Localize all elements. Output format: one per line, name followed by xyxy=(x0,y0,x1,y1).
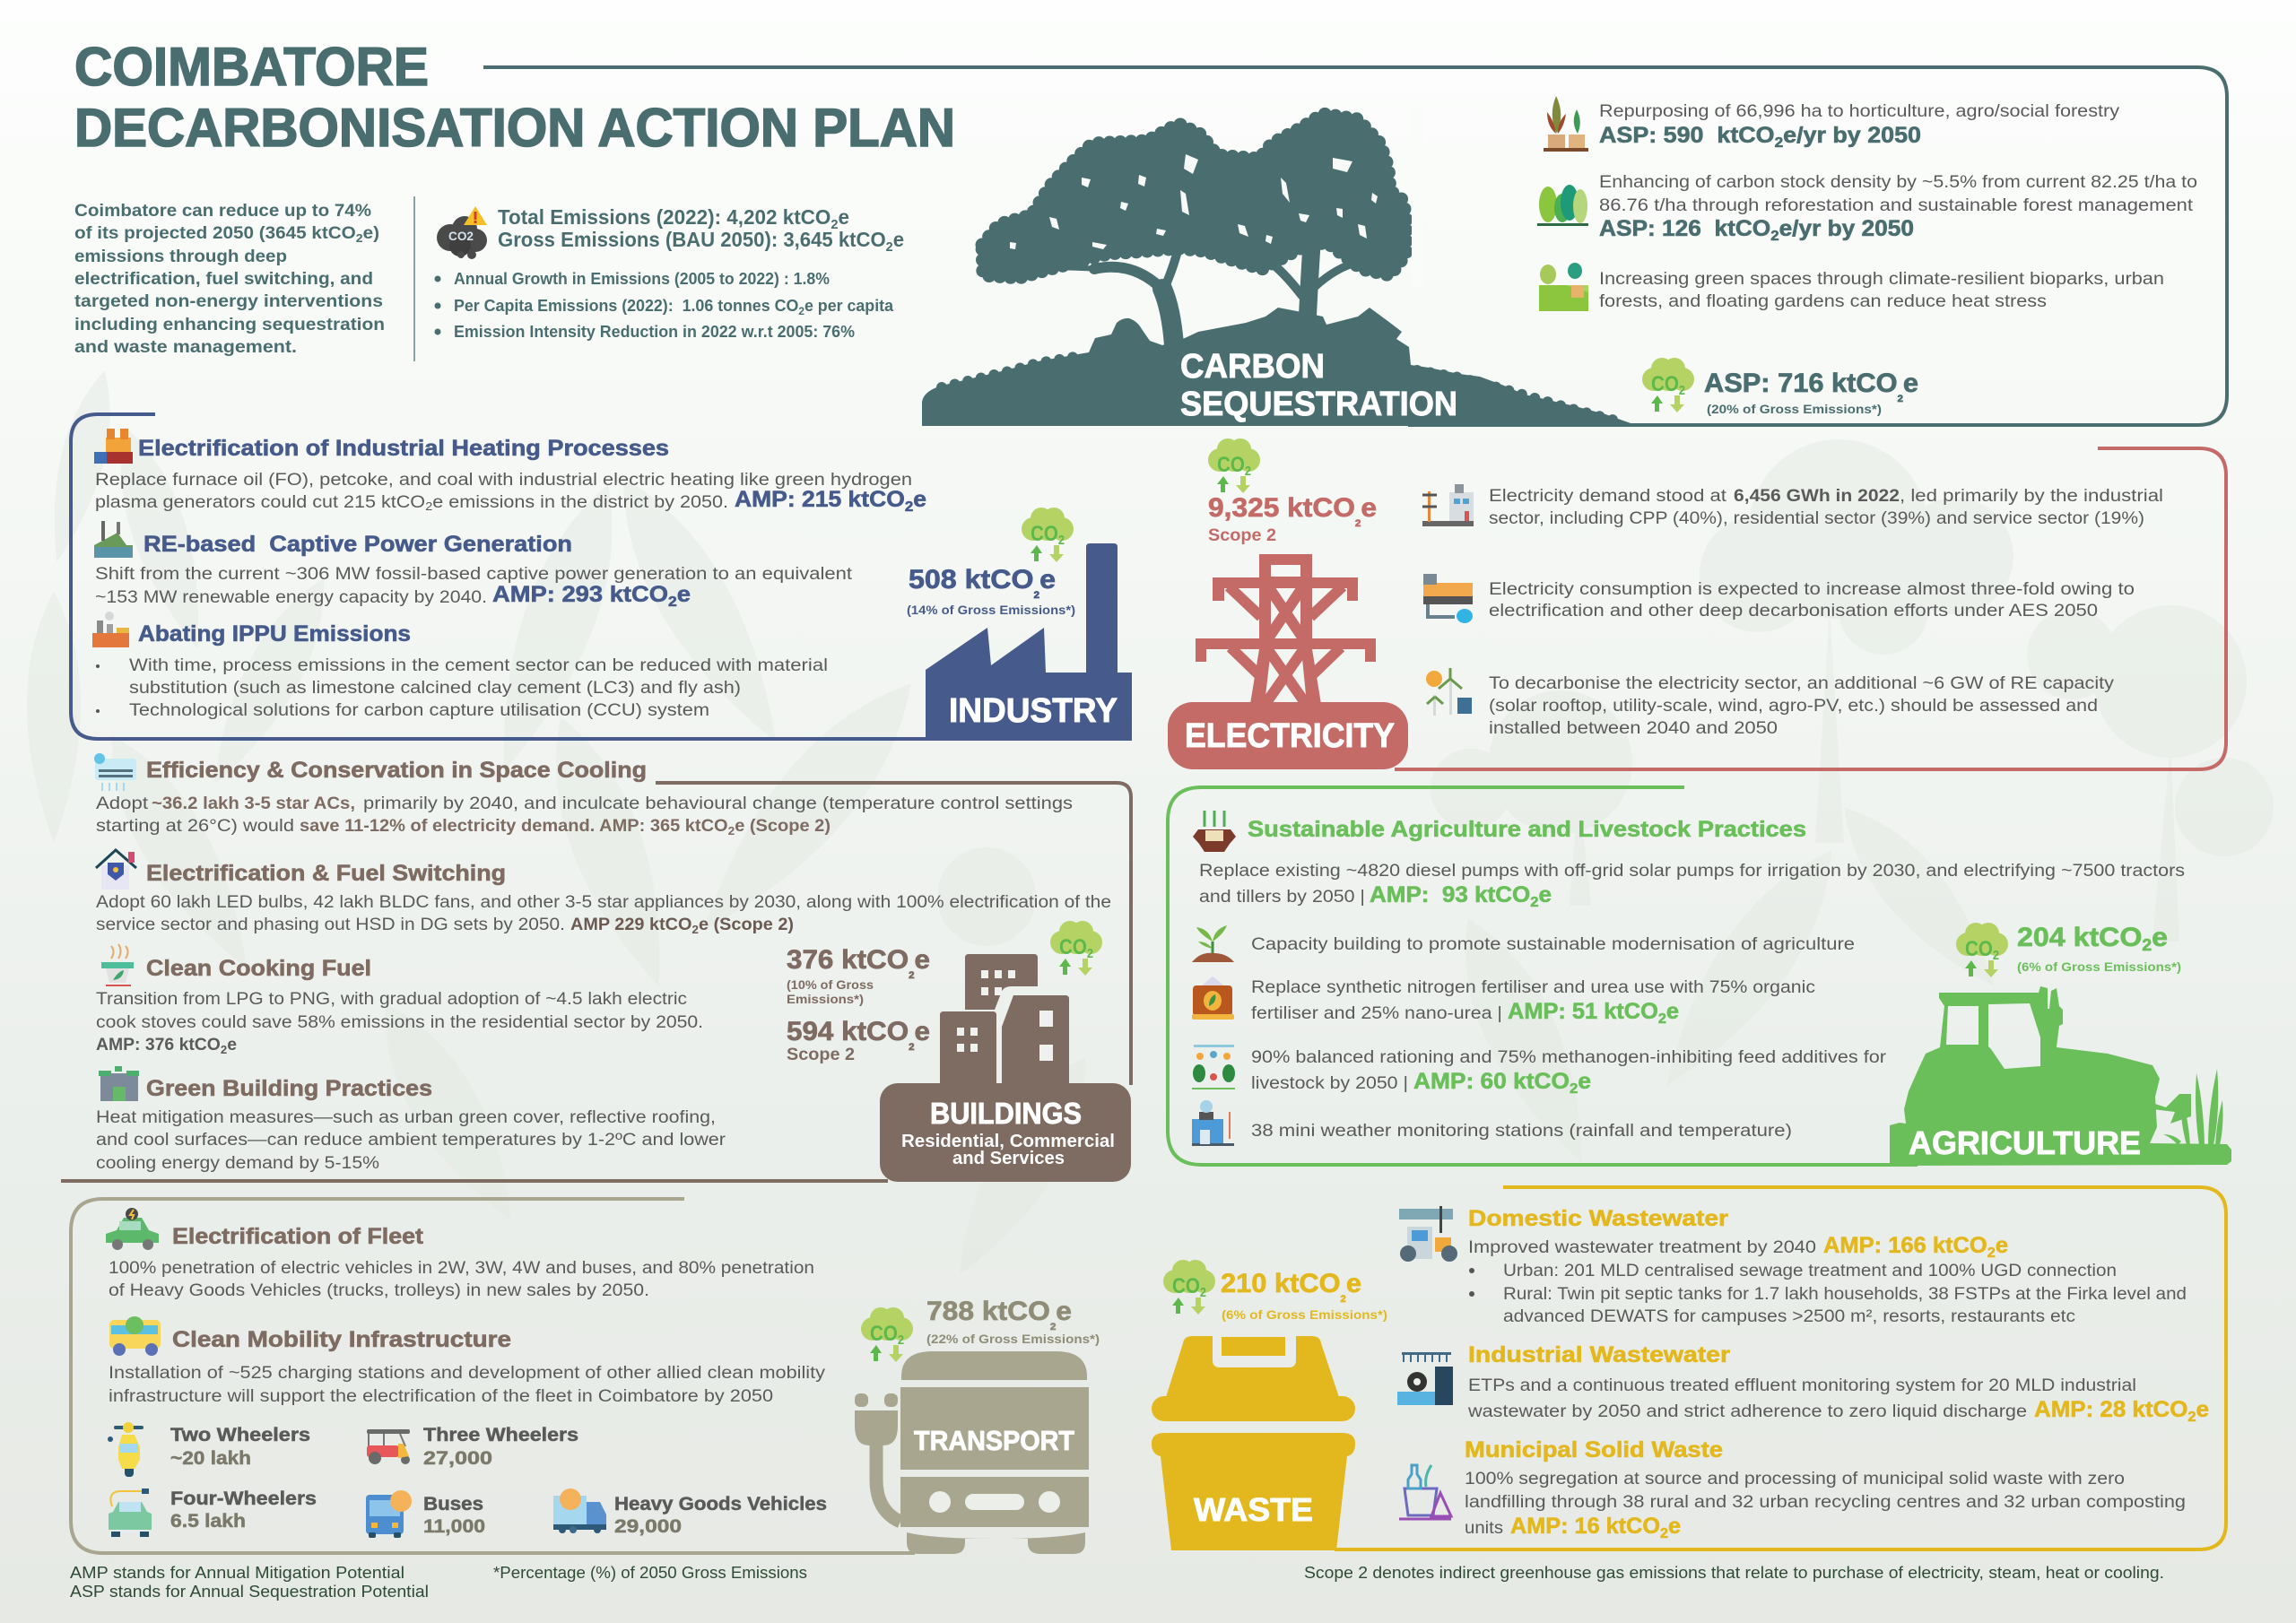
icon: factory plug xyxy=(1423,574,1473,623)
heading: efficiency and conservation: Efficiency & Conservation in Space Cooling xyxy=(146,758,647,783)
icon: weather station xyxy=(1192,1100,1234,1146)
text: green spaces: forests, and floating gardens can reduce heat stress xyxy=(1599,292,2047,311)
footnotes: *Percentage (%) of 2050 Gross Emissions xyxy=(493,1564,807,1582)
text: industrial heating xyxy=(95,471,926,515)
intro paragraph: of its projected 2050 (3645 ktCO xyxy=(74,224,333,243)
text: captive power: AMP: 293 ktCO xyxy=(492,582,653,607)
text: space cooling: Adopt xyxy=(96,794,149,813)
heading: industrial wastewater: Industrial Wastewater xyxy=(1468,1342,1730,1367)
text: electricity demand: , led primarily by the industrial xyxy=(1900,487,2163,506)
icon: CO2 cloud xyxy=(1050,921,1102,976)
text: fertiliser: fertiliser and 25% nano-urea | xyxy=(1251,1004,1502,1023)
intro paragraph: electrification, fuel switching, and xyxy=(74,270,373,289)
text: domestic wastewater: Urban: 201 MLD centralised sewage treatment and 100% UGD connection xyxy=(1503,1262,2117,1280)
text: livestock: AMP: 60 ktCO xyxy=(1413,1069,1561,1094)
stat: 594 ktCO2e: Scope 2 xyxy=(787,1046,855,1064)
text: municipal solid waste xyxy=(1465,1470,2186,1541)
text: municipal solid waste: 100% segregation at source and processing of municipal solid waste with zero xyxy=(1465,1470,2125,1488)
icon: CO2 cloud: CO xyxy=(1172,1274,1205,1298)
text: green buildings: and cool surfaces—can reduce ambient temperatures by 1-2ºC and lower xyxy=(96,1131,726,1150)
icon: green building xyxy=(99,1066,139,1101)
icon: emissions warning cloud: CO2 xyxy=(448,229,474,243)
intro paragraph: and waste management. xyxy=(74,338,297,357)
panel: agriculture xyxy=(1168,787,2231,1166)
icon: CO2 cloud xyxy=(1022,508,1074,562)
icon: CO2 cloud: 2 xyxy=(1993,948,1999,963)
stat: 376 ktCO2e: (10% of Gross xyxy=(787,977,874,992)
item: two wheelers xyxy=(108,1422,310,1477)
text: livestock: 90% balanced rationing and 75% methanogen-inhibiting feed additives for xyxy=(1251,1048,1887,1067)
stat: 508 ktCO2e: e xyxy=(1039,565,1056,595)
text: green buildings: cooling energy demand by 5-15% xyxy=(96,1154,379,1173)
heading: sustainable agriculture: Sustainable Agriculture and Livestock Practices xyxy=(1248,817,1806,842)
label: buildings: and Services xyxy=(952,1149,1065,1168)
stat: 594 ktCO2e: e xyxy=(915,1017,930,1046)
text: space cooling: starting at 26°C) would xyxy=(96,817,294,836)
stat: 204 ktCO2e: e xyxy=(2152,923,2168,952)
icon: city power xyxy=(1422,484,1474,526)
text: livestock: 2 xyxy=(1570,1081,1578,1097)
text: captive power xyxy=(95,565,853,610)
text: industrial heating: 2 xyxy=(425,499,432,513)
illustration: waste bin xyxy=(1152,1336,1355,1550)
emissions statistics: 2 xyxy=(798,305,804,317)
text: fleet xyxy=(109,1259,814,1300)
text: municipal solid waste: e xyxy=(1668,1514,1681,1539)
text: industrial heating: Replace furnace oil (FO), petcoke, and coal with industrial electric heating like green hydrogen xyxy=(95,471,912,490)
text: domestic wastewater xyxy=(1468,1233,2187,1326)
icon: green park xyxy=(1539,263,1588,311)
emissions statistics: 2 xyxy=(886,239,893,255)
text: horticulture and ASP 590: ASP: 590 ktCO xyxy=(1599,123,1762,148)
text: green spaces: Increasing green spaces through climate-resilient bioparks, urban xyxy=(1599,270,2164,289)
item: two wheelers: ~20 lakh xyxy=(170,1448,251,1469)
footnotes: AMP stands for Annual Mitigation Potential xyxy=(70,1564,404,1582)
stat: 204 ktCO2e xyxy=(2017,923,2181,974)
text: domestic wastewater: AMP: 166 ktCO xyxy=(1823,1233,1984,1258)
text: electricity demand: sector, including CPP (40%), residential sector (39%) and service sector (19%) xyxy=(1489,509,2144,528)
illustration: buildings xyxy=(880,954,1131,1182)
text: fuel switching: service sector and phasing out HSD in DG sets by 2050. xyxy=(96,916,565,934)
illustration: trees on a hill xyxy=(922,108,1633,426)
item: three wheelers xyxy=(367,1425,578,1469)
text: fuel switching xyxy=(96,893,1111,936)
icon: sustainable agriculture xyxy=(1193,811,1236,852)
emissions statistics: 2 xyxy=(831,217,839,232)
text: industrial heating: 2 xyxy=(905,499,913,515)
icon: CO2 cloud: CO xyxy=(1651,372,1683,396)
text: electricity consumption: Electricity consumption is expected to increase almost three-fold owing to xyxy=(1489,580,2135,599)
item: buses: 11,000 xyxy=(423,1516,485,1537)
text: electricity demand: 6,456 GWh in 2022 xyxy=(1734,487,1900,506)
intro paragraph: emissions through deep xyxy=(74,247,287,266)
item: four wheelers: Four-Wheelers xyxy=(170,1488,317,1509)
stat: 508 ktCO2e xyxy=(907,565,1075,617)
text: space cooling: 2 xyxy=(728,824,735,838)
text: carbon stock density and ASP 126: e/yr by 2050 xyxy=(1779,216,1914,241)
stat: 788 ktCO2e: 788 ktCO xyxy=(926,1297,1043,1326)
icon: CO2 cloud: CO xyxy=(1217,453,1249,477)
panel: industry xyxy=(71,414,1132,741)
label: buildings: Residential, Commercial xyxy=(901,1132,1115,1151)
text: fertiliser: AMP: 51 ktCO xyxy=(1508,999,1656,1024)
stat: 9,325 ktCO2e: 9,325 ktCO xyxy=(1208,493,1347,523)
emissions statistics: Emission Intensity Reduction in 2022 w.r.t 2005: 76% xyxy=(454,323,855,341)
stat: 594 ktCO2e xyxy=(787,1017,930,1064)
text: electricity demand xyxy=(1489,487,2163,528)
text: clean cooking: e xyxy=(227,1036,237,1055)
label: carbon sequestration xyxy=(1180,348,1457,423)
label: buildings: BUILDINGS xyxy=(930,1097,1082,1130)
text: industrial wastewater xyxy=(1467,1376,2209,1425)
text: clean cooking: Transition from LPG to PNG, with gradual adoption of ~4.5 lakh electric xyxy=(96,990,687,1009)
stat: 376 ktCO2e: e xyxy=(915,945,930,975)
stat: 204 ktCO2e: 204 ktCO xyxy=(2017,923,2134,952)
text: captive power: ~153 MW renewable energy capacity by 2040. xyxy=(95,588,487,607)
text: decarbonise electricity: installed between 2040 and 2050 xyxy=(1489,719,1778,738)
icon: recycling waste xyxy=(1399,1465,1451,1519)
text: carbon stock density and ASP 126: 2 xyxy=(1770,229,1779,244)
text: industrial wastewater: 2 xyxy=(2187,1410,2196,1425)
text: electricity demand: Electricity demand stood at xyxy=(1489,487,1732,506)
icon: livestock feed xyxy=(1192,1045,1235,1089)
item: heavy goods vehicles: Heavy Goods Vehicles xyxy=(614,1494,827,1515)
panel: waste xyxy=(1152,1187,2226,1550)
panel: carbon sequestration xyxy=(483,67,2227,426)
icon: CO2 cloud: CO xyxy=(1059,935,1091,959)
panel: electricity xyxy=(1168,438,2226,769)
label: carbon sequestration: SEQUESTRATION xyxy=(1180,386,1457,423)
text: fuel switching: 2 xyxy=(691,923,699,936)
intro paragraph: Coimbatore can reduce up to 74% xyxy=(74,202,371,221)
text: municipal solid waste: AMP: 16 ktCO xyxy=(1510,1514,1658,1539)
label: transport: TRANSPORT xyxy=(914,1425,1074,1456)
text: industrial heating: plasma generators could cut 215 ktCO xyxy=(95,493,386,512)
emissions statistics: e xyxy=(893,228,904,251)
text: industrial heating: AMP: 215 ktCO xyxy=(735,487,895,512)
text: livestock: livestock by 2050 | xyxy=(1251,1074,1408,1093)
text: municipal solid waste: 2 xyxy=(1660,1526,1668,1541)
emissions statistics: Annual Growth in Emissions (2005 to 2022) : 1.8% xyxy=(454,270,830,288)
text: charging stations: infrastructure will support the electrification of the fleet in Coimbatore by 2050 xyxy=(109,1387,773,1406)
stat: 210 ktCO2e: e xyxy=(1346,1269,1361,1298)
text: IPPU bullets xyxy=(96,656,828,720)
illustration: transmission pylon xyxy=(1196,554,1376,704)
text: domestic wastewater: 2 xyxy=(1987,1245,1996,1261)
icon: clean cooking xyxy=(101,944,134,985)
text: fertiliser: 2 xyxy=(1658,1011,1666,1027)
heading: clean mobility infrastructure: Clean Mobility Infrastructure xyxy=(172,1327,511,1352)
text: fleet: 100% penetration of electric vehicles in 2W, 3W, 4W and buses, and 80% penetration xyxy=(109,1259,814,1278)
text: space cooling: save 11-12% of electricity demand. AMP: 365 ktCO xyxy=(300,817,706,836)
stat: 204 ktCO2e: 2 xyxy=(2142,936,2152,954)
text: carbon stock density and ASP 126: Enhancing of carbon stock density by ~5.5% from current 82.25 t/ha to xyxy=(1599,173,2197,192)
item: two wheelers: Two Wheelers xyxy=(170,1425,310,1445)
icon: domestic wastewater plant xyxy=(1399,1206,1457,1262)
icon: captive power xyxy=(94,521,133,558)
text: domestic wastewater: advanced DEWATS for campuses >2500 m², resorts, restaurants etc xyxy=(1503,1307,2075,1326)
heading: municipal solid waste: Municipal Solid Waste xyxy=(1465,1437,1723,1462)
label: carbon sequestration: CARBON xyxy=(1180,348,1325,386)
icon: CO2 cloud xyxy=(1642,358,1694,412)
text: IPPU bullets: Technological solutions for carbon capture utilisation (CCU) system xyxy=(129,701,709,720)
footnotes: Scope 2 denotes indirect greenhouse gas emissions that relate to purchase of electricity, steam, heat or cooling. xyxy=(1304,1564,2164,1582)
heading: clean cooking fuel: Clean Cooking Fuel xyxy=(146,956,371,981)
emissions statistics: e per capita xyxy=(804,297,894,315)
text: livestock xyxy=(1251,1048,1887,1097)
text: domestic wastewater: Improved wastewater treatment by 2040 xyxy=(1468,1238,1816,1257)
text: green buildings: Heat mitigation measures—such as urban green cover, reflective roofing, xyxy=(96,1108,716,1127)
text: diesel pumps: e xyxy=(1539,882,1552,907)
label: electricity xyxy=(1168,702,1408,769)
text: electricity consumption: electrification and other deep decarbonisation efforts under AES 2050 xyxy=(1489,602,2098,621)
stat: ASP 716 xyxy=(1704,369,1918,416)
item: four wheelers xyxy=(109,1488,317,1537)
icon: CO2 cloud xyxy=(861,1307,913,1362)
text: horticulture and ASP 590: e/yr by 2050 xyxy=(1783,123,1921,148)
item: three wheelers: 27,000 xyxy=(423,1448,492,1469)
item: heavy goods vehicles: 29,000 xyxy=(614,1516,682,1537)
icon: renewables xyxy=(1426,668,1472,716)
stat: ASP 716: e xyxy=(1903,369,1918,398)
stat: 9,325 ktCO2e xyxy=(1208,493,1377,545)
heading: RE-based captive power: RE-based Captive Power Generation xyxy=(144,532,572,557)
intro paragraph xyxy=(74,202,385,357)
illustration: tractor xyxy=(1890,986,2231,1166)
stat: 210 ktCO2e: 210 ktCO xyxy=(1221,1269,1337,1298)
text: industrial wastewater: ETPs and a continuous treated effluent monitoring system for 20 MLD industrial xyxy=(1468,1376,2136,1395)
stat: ASP 716: (20% of Gross Emissions*) xyxy=(1707,402,1882,416)
title xyxy=(74,37,955,158)
emissions statistics xyxy=(435,205,904,341)
stat: 508 ktCO2e: 2 xyxy=(1034,590,1039,601)
stat: 788 ktCO2e: 2 xyxy=(1050,1322,1056,1332)
text: space cooling: primarily by 2040, and inculcate behavioural change (temperature control settings xyxy=(363,794,1073,813)
heading: electrification of fleet: Electrification of Fleet xyxy=(172,1224,424,1249)
text: carbon stock density and ASP 126: 86.76 t/ha through reforestation and sustainable forest management xyxy=(1599,196,2194,215)
text: space cooling xyxy=(96,794,1073,838)
stat: 376 ktCO2e xyxy=(787,945,930,1006)
illustration: electric bus with plug xyxy=(855,1351,1089,1554)
icon: CO2 cloud: 2 xyxy=(1245,464,1251,479)
text: decarbonise electricity xyxy=(1489,674,2115,738)
text: horticulture and ASP 590 xyxy=(1599,102,2120,151)
icon: industrial heating xyxy=(94,429,133,464)
text: diesel pumps: Replace existing ~4820 diesel pumps with off-grid solar pumps for irrigation by 2030, and electrifying ~7500 tractors xyxy=(1199,862,2185,881)
text: charging stations xyxy=(109,1364,826,1406)
stat: 788 ktCO2e xyxy=(926,1297,1100,1346)
icon: cement plant xyxy=(92,612,129,647)
stat: 376 ktCO2e: Emissions*) xyxy=(787,992,864,1006)
stat: ASP 716: ASP: 716 ktCO xyxy=(1704,369,1892,398)
text: municipal solid waste: units xyxy=(1465,1519,1503,1538)
text: weather stations: 38 mini weather monitoring stations (rainfall and temperature) xyxy=(1251,1122,1792,1141)
panel: transport xyxy=(71,1199,1100,1554)
intro paragraph: including enhancing sequestration xyxy=(74,316,385,334)
text: horticulture and ASP 590: 2 xyxy=(1775,135,1783,151)
text: industrial heating: e emissions in the district by 2050. xyxy=(432,493,728,512)
icon: CO2 cloud: CO xyxy=(1965,937,1997,961)
emissions statistics: Per Capita Emissions (2022): 1.06 tonnes CO xyxy=(454,297,802,315)
text: fertiliser: e xyxy=(1666,999,1679,1024)
text: fuel switching: AMP 229 ktCO xyxy=(570,916,687,934)
icon: electric car xyxy=(106,1208,159,1250)
item: buses: Buses xyxy=(423,1494,483,1515)
text: IPPU bullets: substitution (such as limestone calcined clay cement (LC3) and fly ash) xyxy=(129,679,741,698)
icon: CO2 cloud: 2 xyxy=(1679,383,1685,398)
text: diesel pumps: AMP: 93 ktCO xyxy=(1370,882,1524,907)
icon: potted plants xyxy=(1544,96,1588,152)
text: diesel pumps: and tillers by 2050 | xyxy=(1199,888,1365,907)
stat: 204 ktCO2e: (6% of Gross Emissions*) xyxy=(2017,959,2181,974)
stat: 508 ktCO2e: 508 ktCO xyxy=(909,565,1025,595)
text: carbon stock density and ASP 126: ASP: 126 ktCO xyxy=(1599,216,1762,241)
text: clean cooking: AMP: 376 ktCO xyxy=(96,1036,218,1055)
heading: domestic wastewater: Domestic Wastewater xyxy=(1468,1206,1728,1231)
text: fertiliser: Replace synthetic nitrogen fertiliser and urea use with 75% organic xyxy=(1251,978,1815,997)
icon: emissions warning cloud xyxy=(437,206,487,259)
icon: fertiliser bag xyxy=(1192,976,1234,1020)
heading: electrification and fuel switching: Electrification & Fuel Switching xyxy=(146,861,506,886)
panel: buildings xyxy=(61,753,1131,1182)
text: charging stations: Installation of ~525 charging stations and development of other allied clean mobility xyxy=(109,1364,826,1383)
icon: CO2 cloud: 2 xyxy=(1200,1285,1206,1300)
stat: ASP 716: 2 xyxy=(1898,394,1903,404)
text: fuel switching: e (Scope 2) xyxy=(699,916,794,934)
text: industrial wastewater: wastewater by 2050 and strict adherence to zero liquid discharge xyxy=(1467,1402,2027,1421)
text: clean cooking xyxy=(96,990,703,1056)
stat: 376 ktCO2e: 2 xyxy=(909,970,915,981)
text: fertiliser xyxy=(1251,978,1815,1027)
icon: air conditioner xyxy=(94,753,136,791)
text: electricity consumption xyxy=(1489,580,2135,621)
text: captive power: 2 xyxy=(668,595,677,610)
text: decarbonise electricity: To decarbonise the electricity sector, an additional ~6 GW of RE capacity xyxy=(1489,674,2115,693)
title: COIMBATORE xyxy=(74,37,429,97)
text: clean cooking: cook stoves could save 58% emissions in the residential sector by 2050. xyxy=(96,1013,703,1032)
stat: 376 ktCO2e: 376 ktCO xyxy=(787,945,903,975)
stat: 210 ktCO2e: (6% of Gross Emissions*) xyxy=(1222,1307,1387,1322)
intro paragraph: 2 xyxy=(356,231,363,245)
footnotes: ASP stands for Annual Sequestration Potential xyxy=(70,1583,429,1601)
text: captive power: Shift from the current ~306 MW fossil-based captive power generation to an equivalent xyxy=(95,565,853,584)
heading: abating IPPU emissions: Abating IPPU Emissions xyxy=(138,621,411,647)
item: four wheelers: 6.5 lakh xyxy=(170,1511,246,1532)
text: decarbonise electricity: (solar rooftop, utility-scale, wind, agro-PV, etc.) should be assessed and xyxy=(1489,697,2098,716)
stat: 788 ktCO2e: (22% of Gross Emissions*) xyxy=(926,1332,1100,1346)
text: diesel pumps xyxy=(1199,862,2185,910)
item: three wheelers: Three Wheelers xyxy=(423,1425,578,1445)
emissions statistics: e xyxy=(839,205,849,229)
text: fleet: of Heavy Goods Vehicles (trucks, trolleys) in new sales by 2050. xyxy=(109,1281,649,1300)
text: clean cooking: 2 xyxy=(221,1043,227,1056)
stat: 210 ktCO2e: 2 xyxy=(1341,1294,1346,1305)
icon: CO2 cloud xyxy=(1956,923,2008,977)
intro paragraph: e) xyxy=(363,224,379,243)
icon: industrial wastewater xyxy=(1397,1352,1453,1405)
icon: house plug xyxy=(96,850,136,890)
illustration: factory xyxy=(926,543,1132,741)
stat: 9,325 ktCO2e: e xyxy=(1361,493,1377,523)
text: industrial heating: e xyxy=(913,487,926,512)
item: buses xyxy=(366,1490,485,1538)
text: carbon stock density and ASP 126 xyxy=(1599,173,2197,244)
label: waste: WASTE xyxy=(1194,1491,1313,1528)
title: DECARBONISATION ACTION PLAN xyxy=(74,98,955,158)
label: electricity: ELECTRICITY xyxy=(1185,717,1395,755)
text: captive power: e xyxy=(677,582,691,607)
icon: electric bus xyxy=(109,1316,161,1356)
heading: electrification of industrial heating: Electrification of Industrial Heating Processes xyxy=(138,436,669,461)
label: buildings xyxy=(901,1097,1115,1168)
icon: CO2 cloud: CO xyxy=(870,1322,902,1346)
stat: 210 ktCO2e xyxy=(1221,1269,1387,1322)
emissions statistics: Gross Emissions (BAU 2050): 3,645 ktCO xyxy=(498,228,901,251)
stat: 508 ktCO2e: (14% of Gross Emissions*) xyxy=(907,603,1075,617)
stat: 594 ktCO2e: 594 ktCO xyxy=(787,1017,903,1046)
label: agriculture: AGRICULTURE xyxy=(1909,1124,2141,1161)
intro paragraph: targeted non-energy interventions xyxy=(74,292,383,311)
text: livestock: e xyxy=(1578,1069,1591,1094)
icon: CO2 cloud: 2 xyxy=(898,1332,904,1348)
text: domestic wastewater: Rural: Twin pit septic tanks for 1.7 lakh households, 38 FSTPs at the Firka level and xyxy=(1503,1285,2187,1304)
text: space cooling: e (Scope 2) xyxy=(735,817,831,836)
icon: CO2 cloud: 2 xyxy=(1058,533,1065,548)
text: industrial wastewater: AMP: 28 ktCO xyxy=(2034,1397,2182,1422)
text: municipal solid waste: landfilling through 38 rural and 32 urban recycling centres and 32 urban composting xyxy=(1465,1493,2186,1512)
text: diesel pumps: 2 xyxy=(1530,895,1539,910)
icon: forest xyxy=(1537,185,1588,226)
text: green spaces xyxy=(1599,270,2164,311)
text: green buildings xyxy=(96,1108,726,1173)
heading: green building practices: Green Building Practices xyxy=(146,1076,432,1101)
stat: 9,325 ktCO2e: Scope 2 xyxy=(1208,526,1276,545)
text: industrial wastewater: e xyxy=(2196,1397,2209,1422)
icon: CO2 cloud xyxy=(1163,1260,1215,1315)
footnotes xyxy=(70,1564,2164,1601)
text: IPPU bullets: With time, process emissions in the cement sector can be reduced with material xyxy=(129,656,828,675)
text: space cooling: ~36.2 lakh 3-5 star ACs, xyxy=(152,794,355,813)
label: industry: INDUSTRY xyxy=(949,692,1118,730)
stat: 9,325 ktCO2e: 2 xyxy=(1355,518,1361,529)
stat: 788 ktCO2e: e xyxy=(1056,1297,1072,1326)
icon: CO2 cloud: CO xyxy=(1031,522,1063,546)
text: domestic wastewater: e xyxy=(1996,1233,2008,1258)
icon: CO2 cloud: 2 xyxy=(1087,946,1093,961)
text: horticulture and ASP 590: Repurposing of 66,996 ha to horticulture, agro/social forestry xyxy=(1599,102,2120,121)
text: fuel switching: Adopt 60 lakh LED bulbs, 42 lakh BLDC fans, and other 3-5 star appliances by 2030, along with 100% electrification of the xyxy=(96,893,1111,912)
text: capacity building: Capacity building to promote sustainable modernisation of agriculture xyxy=(1251,935,1855,954)
icon: capacity building xyxy=(1192,925,1234,962)
item: heavy goods vehicles xyxy=(553,1488,827,1537)
emissions statistics: Total Emissions (2022): 4,202 ktCO xyxy=(498,205,839,229)
stat: 594 ktCO2e: 2 xyxy=(909,1042,915,1053)
icon: CO2 cloud xyxy=(1208,438,1260,493)
